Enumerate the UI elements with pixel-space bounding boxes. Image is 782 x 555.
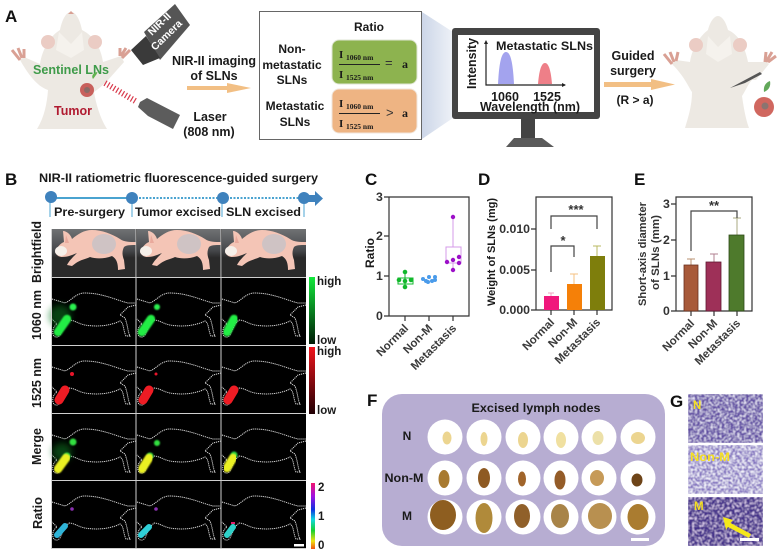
timeline: SLN excised (226, 205, 301, 219)
bars (684, 218, 744, 311)
row labels (30, 221, 45, 529)
label: 1060: 1060 (491, 90, 519, 104)
ticks: 0 (376, 309, 383, 323)
dishes (428, 420, 656, 534)
axis label line 2: of SLNs (mm) (650, 215, 662, 290)
colorbar: 1060 nm: low (317, 335, 336, 347)
label A: A (5, 7, 17, 26)
zoom wedge (422, 12, 453, 139)
panel: F excised lymph nodes (367, 391, 665, 546)
formula: metastatic: I (339, 98, 343, 110)
bars (544, 246, 605, 310)
merge row (52, 429, 306, 473)
image M: M (694, 501, 704, 513)
row labels: Merge (30, 428, 44, 465)
formula: non-metastatic (332, 40, 417, 84)
formula: non-metastatic: 1525 nm (346, 73, 374, 82)
formula: metastatic (332, 89, 417, 133)
row labels: N (403, 429, 411, 443)
icon: laser beam (105, 83, 137, 102)
label: Non-metastatic: metastatic (262, 58, 322, 72)
ticks: 0 (663, 304, 670, 318)
label: Metastatic: Metastatic (266, 99, 325, 113)
image Non-M (688, 445, 763, 494)
row labels: 1060 nm (30, 290, 44, 340)
colorbar: 1525 nm: low (317, 405, 336, 417)
arrow: guided surgery (604, 79, 675, 90)
ticks: 3 (376, 190, 383, 204)
category labels: Non-M (401, 323, 435, 356)
icon: NIR-II camera (131, 4, 190, 65)
axis label line 1: Short-axis diameter (637, 201, 649, 306)
row labels: Brightfield (30, 221, 44, 283)
significance bracket (691, 198, 737, 251)
formula: metastatic: 1525 nm (346, 122, 374, 131)
category labels (661, 318, 743, 368)
ticks: 2 (663, 233, 670, 247)
label: Guided surgery: Guided (611, 49, 655, 63)
panel: B surgery imaging (5, 170, 341, 552)
ticks: 0.005 (499, 263, 530, 277)
image N: N (693, 400, 701, 412)
category labels: Metastasis (553, 317, 603, 367)
significance brackets (551, 202, 597, 272)
ticks: 0.010 (499, 222, 530, 236)
label: Sentinel LNs: Sentinel LNs (33, 63, 109, 77)
axis label: Weight of SLNs (mg) (486, 198, 498, 306)
significance brackets: *** (568, 202, 585, 217)
label B: B (5, 170, 17, 189)
formula: non-metastatic: = (385, 55, 393, 70)
label: Laser: Laser (193, 110, 227, 124)
category labels: Metastasis (409, 323, 459, 373)
panel: A schematic (5, 4, 776, 147)
formula: non-metastatic: a (402, 57, 408, 71)
axis label: Ratio (363, 238, 377, 268)
stage labels: Pre-surgery (54, 205, 125, 219)
image Non-M: Non-M (690, 452, 730, 464)
formula: non-metastatic: 1060 nm (346, 53, 374, 62)
scale bar (294, 544, 304, 546)
panel: C ratio chart (363, 170, 469, 373)
panel: G histology (670, 392, 763, 546)
colorbar: ratio (311, 482, 325, 552)
label: 808 nm: (808 nm) (183, 125, 235, 139)
category labels: Normal (661, 318, 697, 354)
label: Tumor: Tumor (54, 104, 92, 118)
icon: NIR-II camera: NIR-II (146, 10, 174, 38)
1525 nm row (52, 361, 306, 405)
label G: G (670, 392, 683, 411)
colorbar: 1060 nm: high (317, 276, 341, 288)
panel: ratio box (260, 12, 422, 140)
category labels: Normal (521, 317, 557, 353)
image grid (49, 229, 306, 549)
category labels (375, 323, 459, 373)
ratio row (52, 496, 306, 540)
label: 1525: 1525 (533, 90, 561, 104)
icon: laser device (138, 98, 180, 129)
label: of SLNs: of SLNs (190, 69, 238, 83)
label: Non-metastatic: Non- (278, 42, 306, 56)
row labels: Ratio (31, 497, 45, 529)
icon: tumor (80, 83, 94, 97)
colorbar: 1525 nm (309, 346, 341, 417)
ticks: 2 (376, 229, 383, 243)
icon: monitor (452, 28, 600, 147)
colorbar: 1060 nm (309, 276, 341, 347)
timeline (45, 191, 323, 219)
panel: E diameter chart (634, 170, 752, 368)
ticks: 0.000 (499, 303, 530, 317)
ticks (376, 190, 383, 323)
label E: E (634, 170, 645, 189)
icon: NIR-II camera: Camera (149, 18, 185, 53)
label: R > a: (R > a) (616, 93, 654, 107)
data: non-M (421, 275, 437, 284)
scale bar (740, 538, 759, 541)
row labels: 1525 nm (30, 358, 44, 408)
category labels: Non-M (546, 317, 580, 350)
arrow (723, 517, 751, 538)
formula: metastatic: > (386, 105, 394, 120)
nodes N (442, 431, 645, 448)
heading: Excised lymph nodes (472, 401, 601, 415)
brightfield row (52, 229, 306, 277)
ticks: 1 (376, 269, 383, 283)
ticks (663, 197, 670, 318)
nodes Non-M (438, 468, 642, 490)
formula: non-metastatic: I (339, 69, 343, 81)
colorbar: ratio: 0 (318, 540, 324, 552)
label: Wavelength: Wavelength (nm) (480, 100, 580, 114)
nodes M (430, 500, 648, 533)
1060 nm row (49, 293, 306, 337)
heading: Ratio: Ratio (354, 20, 384, 34)
row labels (384, 429, 424, 523)
label D: D (478, 170, 490, 189)
category labels: Normal (375, 323, 411, 359)
heading: NIR-II ratiometric fluorescence-guided surgery (39, 171, 318, 185)
panel dividers (51, 229, 306, 549)
formula: metastatic: a (402, 106, 408, 120)
formula: metastatic: 1060 nm (346, 102, 374, 111)
ticks: 1 (663, 269, 670, 283)
category labels (521, 317, 603, 367)
spectrum chart (465, 38, 593, 114)
arrow: imaging (187, 83, 251, 93)
timeline: Tumor excised (135, 205, 221, 219)
category labels: Non-M (686, 318, 720, 351)
panel: D weight chart (478, 170, 612, 367)
icon: operated mouse (664, 16, 776, 128)
label F: F (367, 391, 377, 410)
label: Metastatic SLNs: Metastatic SLNs (496, 39, 593, 53)
scale bar (631, 538, 649, 541)
label: Metastatic: SLNs (280, 115, 311, 129)
row labels: Non-M (384, 471, 424, 485)
formula: metastatic: I (339, 118, 343, 130)
colorbar: ratio: 1 (318, 511, 325, 523)
data: normal (397, 270, 413, 289)
ticks: 3 (663, 197, 670, 211)
image M (688, 497, 763, 546)
significance brackets: * (560, 233, 566, 248)
data: metastasis (445, 215, 461, 272)
row labels: M (402, 509, 412, 523)
category labels: Metastasis (693, 318, 743, 368)
label: Guided surgery: surgery (610, 64, 656, 78)
ticks (499, 222, 530, 317)
image N (688, 394, 763, 443)
label C: C (365, 170, 377, 189)
colorbar: ratio: 2 (318, 482, 324, 494)
icon: mouse with tumor (12, 11, 130, 129)
formula: non-metastatic: I (339, 49, 343, 61)
label: NIR-II imaging: NIR-II imaging (172, 54, 256, 68)
colorbar: 1525 nm: high (317, 346, 341, 358)
label: Non-metastatic: SLNs (277, 73, 308, 87)
significance bracket: ** (709, 198, 720, 213)
label: Intensity: Intensity (465, 38, 479, 89)
